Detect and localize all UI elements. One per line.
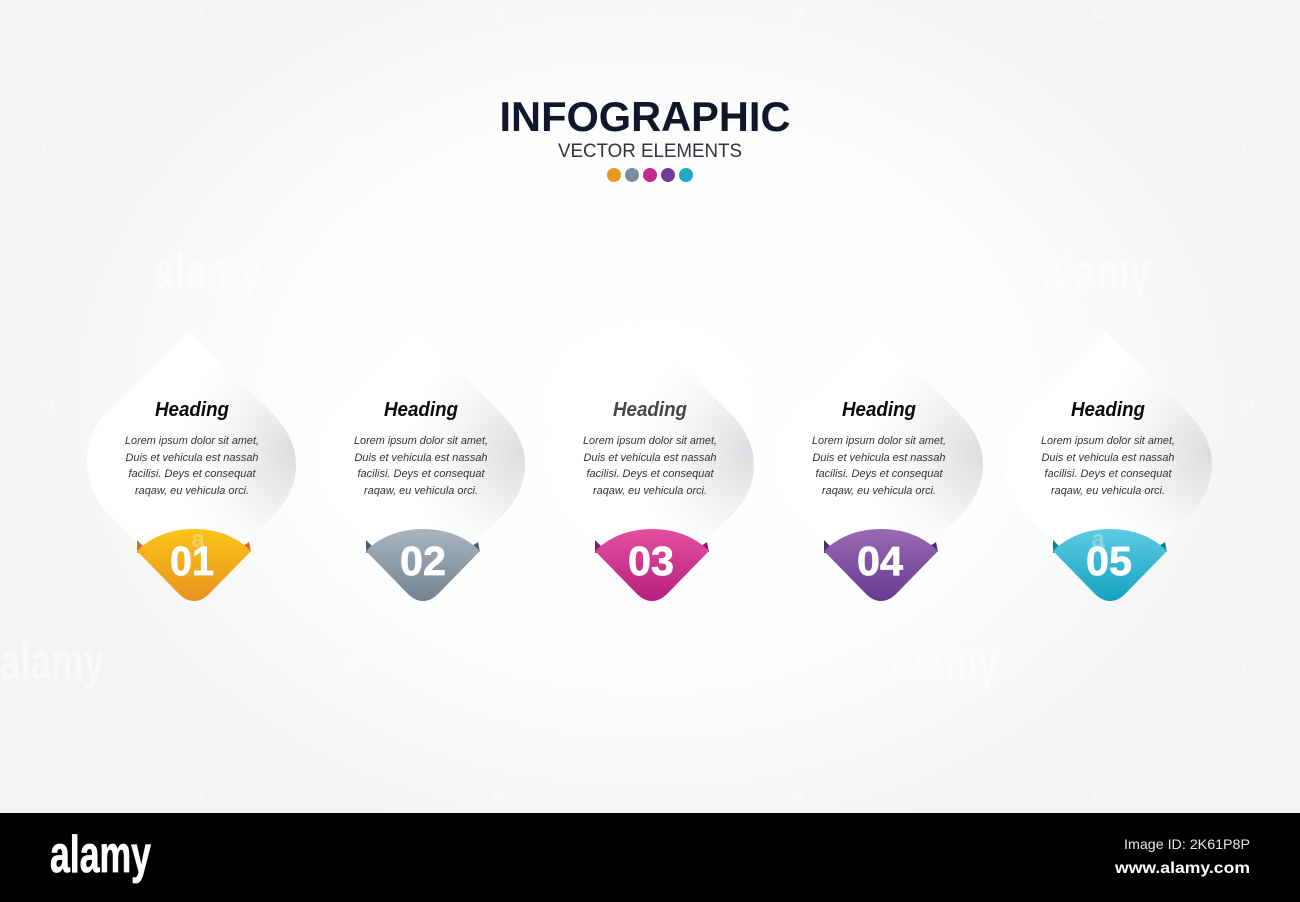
body text: Lorem ipsum dolor sit amet, xyxy=(125,435,259,447)
watermarks: a xyxy=(1241,650,1255,677)
alamy logo: alamy xyxy=(50,826,151,884)
number: 03 xyxy=(628,538,674,584)
panel: step 05 xyxy=(1003,332,1212,601)
body text: Lorem ipsum dolor sit amet, xyxy=(583,435,717,447)
number: 05 xyxy=(1086,538,1132,584)
panel: step 04 xyxy=(774,332,983,601)
number: 04 xyxy=(857,538,903,584)
watermarks: alamy xyxy=(153,243,261,301)
watermarks: a xyxy=(341,650,355,677)
watermarks: a xyxy=(341,130,355,157)
body text: raqaw, eu vehicula orci. xyxy=(135,485,249,497)
heading: Heading xyxy=(1071,399,1145,421)
number: 01 xyxy=(170,538,214,584)
watermarks: a xyxy=(192,780,206,807)
body text: facilisi. Deys et consequat xyxy=(128,468,256,480)
heading: Heading xyxy=(384,399,458,421)
body text: facilisi. Deys et consequat xyxy=(586,468,714,480)
body text xyxy=(583,435,717,497)
panel: step 01 xyxy=(87,332,296,601)
watermarks: a xyxy=(1091,780,1105,807)
body text: Lorem ipsum dolor sit amet, xyxy=(1041,435,1175,447)
body text: facilisi. Deys et consequat xyxy=(1044,468,1172,480)
heading: Heading xyxy=(155,399,229,421)
badge ears xyxy=(824,540,938,553)
body text xyxy=(354,435,488,497)
subtitle: VECTOR ELEMENTS xyxy=(558,140,742,162)
title: INFOGRAPHIC xyxy=(500,93,790,140)
card shape xyxy=(774,332,983,556)
heading: Heading xyxy=(613,399,687,421)
watermarks: a xyxy=(1241,390,1255,417)
body text: Duis et vehicula est nassah xyxy=(812,452,946,464)
body text: facilisi. Deys et consequat xyxy=(358,468,485,480)
watermarks: alamy xyxy=(891,633,999,691)
number: 02 xyxy=(400,538,446,584)
badge ears xyxy=(366,540,480,553)
body text: Duis et vehicula est nassah xyxy=(126,452,258,464)
body text xyxy=(1041,435,1175,497)
heading: Heading xyxy=(842,399,916,421)
watermark letter on badge: a xyxy=(1091,526,1105,553)
card shape xyxy=(545,332,754,556)
watermarks: a xyxy=(941,130,955,157)
watermarks: a xyxy=(641,650,655,677)
body text: Duis et vehicula est nassah xyxy=(354,452,488,464)
body text xyxy=(812,435,946,497)
body text: Lorem ipsum dolor sit amet, xyxy=(812,435,946,447)
card shape xyxy=(1003,332,1212,556)
badge ears xyxy=(1053,540,1167,553)
colour dots xyxy=(607,168,693,182)
number badge xyxy=(595,529,709,601)
number badge xyxy=(1053,529,1167,601)
card shape xyxy=(87,332,296,556)
watermarks: a xyxy=(41,130,55,157)
watermarks: a xyxy=(1241,130,1255,157)
body text: Duis et vehicula est nassah xyxy=(584,452,716,464)
body text: raqaw, eu vehicula orci. xyxy=(593,485,707,497)
website: www.alamy.com xyxy=(1114,860,1250,877)
panel: step 03 xyxy=(545,332,754,601)
body text: Duis et vehicula est nassah xyxy=(1042,452,1174,464)
number badge xyxy=(137,529,251,601)
body text xyxy=(125,435,259,497)
watermarks: alamy xyxy=(1043,243,1151,301)
body text: raqaw, eu vehicula orci. xyxy=(1051,485,1165,497)
body text: raqaw, eu vehicula orci. xyxy=(822,485,936,497)
badge ears xyxy=(137,540,251,553)
panel: step 02 xyxy=(316,332,525,601)
card shape xyxy=(316,332,525,556)
body text: raqaw, eu vehicula orci. xyxy=(364,485,478,497)
watermarks: a xyxy=(41,390,55,417)
badge ears xyxy=(595,540,709,553)
footer bar xyxy=(0,813,1300,902)
body text: facilisi. Deys et consequat xyxy=(816,468,943,480)
watermark letter on badge: a xyxy=(191,526,205,553)
number badge xyxy=(366,529,480,601)
watermarks: a xyxy=(491,780,505,807)
image id: Image ID: 2K61P8P xyxy=(1124,836,1250,852)
watermarks: alamy xyxy=(0,633,104,691)
number badge xyxy=(824,529,938,601)
body text: Lorem ipsum dolor sit amet, xyxy=(354,435,488,447)
watermarks: a xyxy=(791,780,805,807)
